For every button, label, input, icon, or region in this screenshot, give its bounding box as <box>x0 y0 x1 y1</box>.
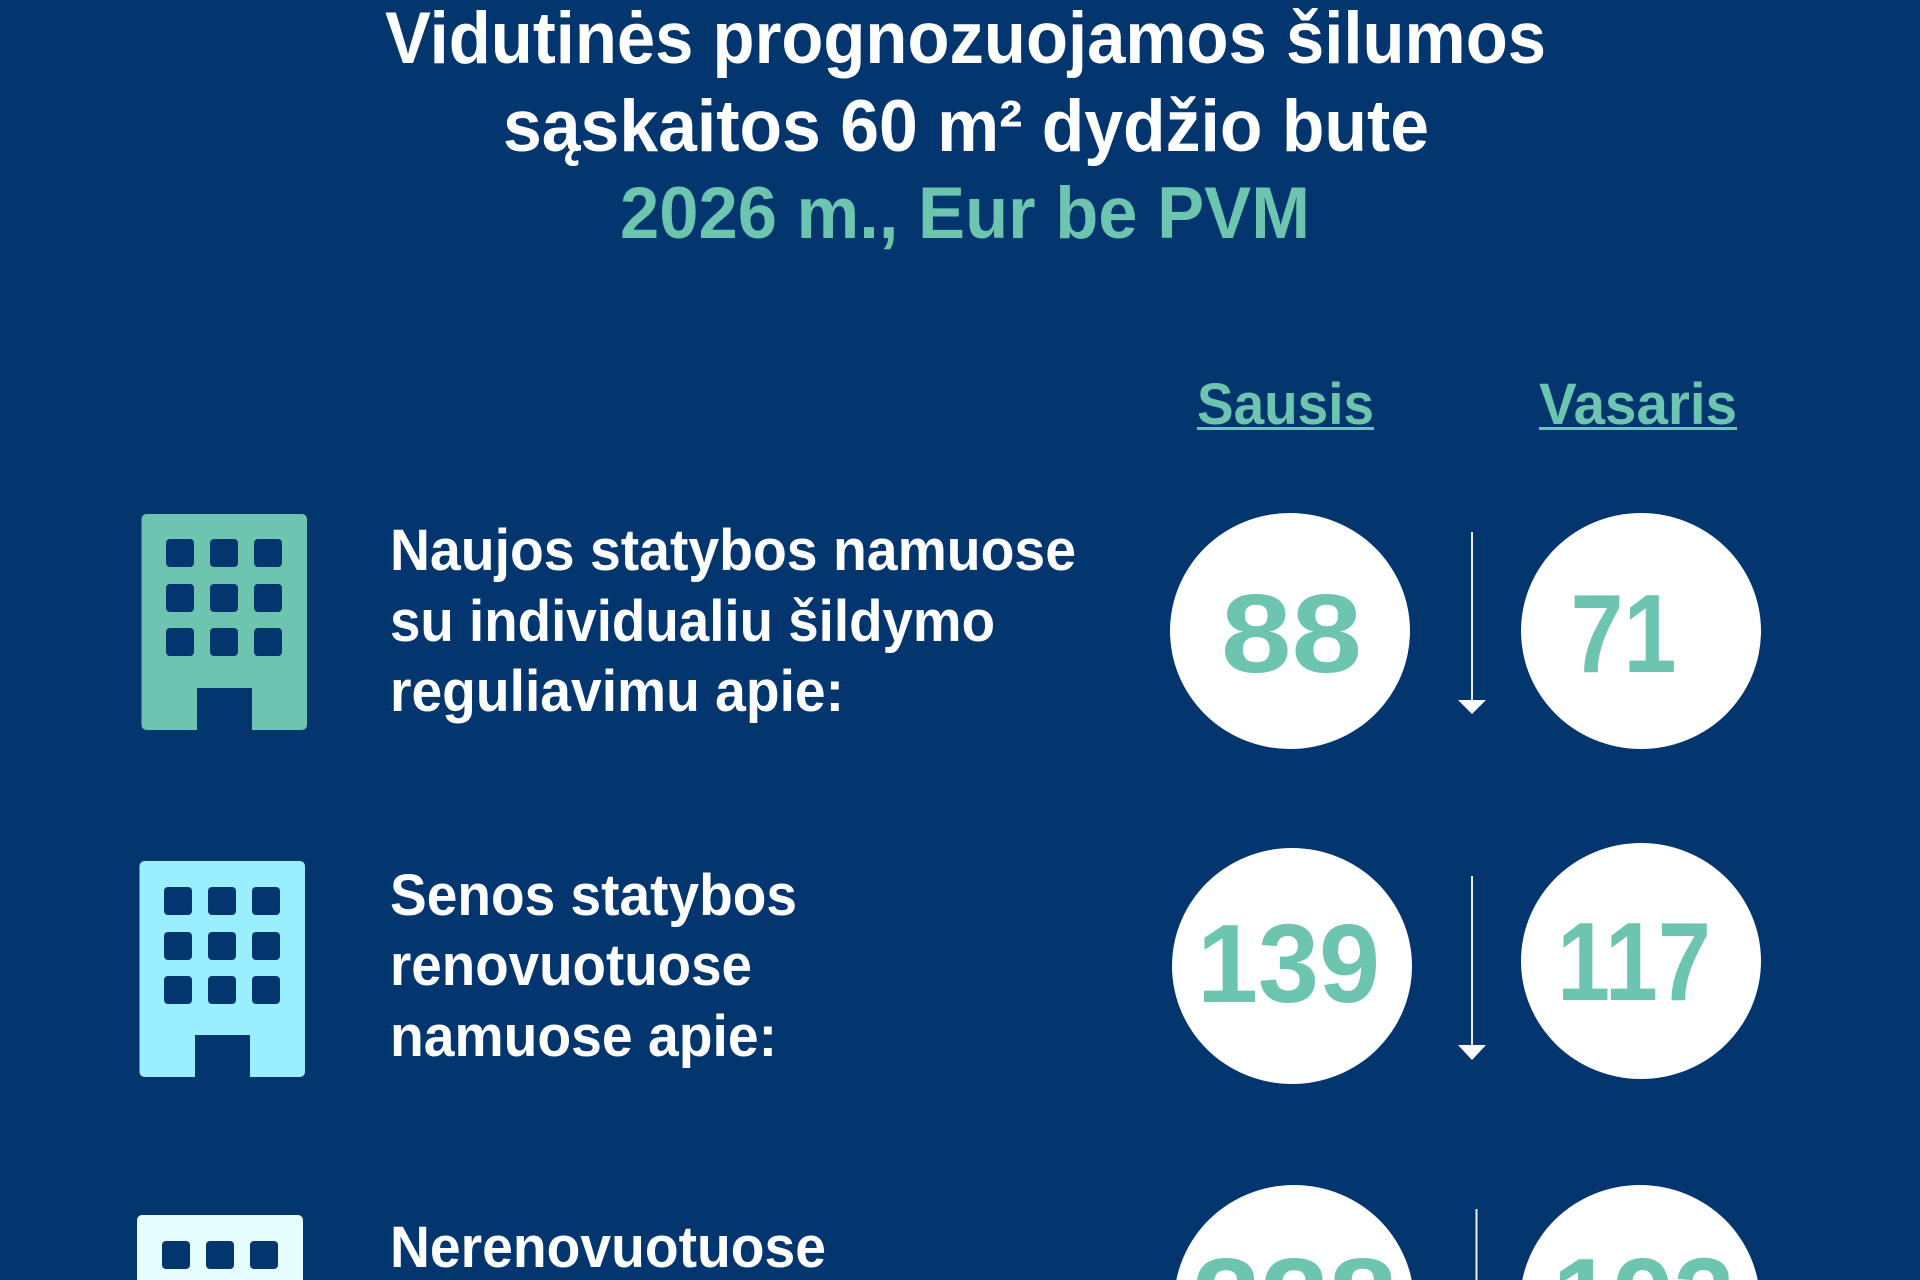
row: old renovated buildings <box>140 843 1761 1084</box>
row label: old renovated buildings: renovuotuose <box>390 933 752 998</box>
column header: Vasaris: Vasaris <box>1539 372 1737 437</box>
icon: pale building <box>137 1215 303 1280</box>
row label: old renovated buildings <box>390 863 797 1069</box>
icon: light blue building <box>140 861 305 1077</box>
arrow: decrease <box>1458 876 1486 1060</box>
circle: February value 117 <box>1521 843 1761 1079</box>
title <box>385 0 1546 254</box>
row label: old renovated buildings: Senos statybos <box>390 863 797 928</box>
circle: January value 88: 88 <box>1221 572 1362 696</box>
circle: January value <box>1176 1185 1412 1280</box>
icon: teal building <box>142 514 307 730</box>
row label: old renovated buildings: namuose apie: <box>390 1004 777 1069</box>
row label: new buildings: reguliavimu apie: <box>390 659 844 724</box>
circle: February value <box>1522 1185 1758 1280</box>
circle: February value 71 <box>1521 513 1761 749</box>
circle: February value 117: 117 <box>1557 900 1711 1024</box>
row label: new buildings: Naujos statybos namuose <box>390 518 1076 583</box>
row label: unrenovated buildings: Nerenovuotuose <box>390 1215 826 1280</box>
circle: January value 139: 139 <box>1197 902 1380 1026</box>
row label: new buildings <box>390 518 1076 724</box>
title: 2026 m., Eur be PVM <box>620 173 1310 254</box>
row label: new buildings: su individualiu šildymo <box>390 589 995 654</box>
row: unrenovated buildings <box>137 1185 1760 1280</box>
title: sąskaitos 60 m² dydžio bute <box>503 86 1429 167</box>
row: new buildings <box>142 513 1761 749</box>
arrow: decrease <box>1458 532 1486 714</box>
title: Vidutinės prognozuojamos šilumos <box>385 0 1546 79</box>
arrow: decrease <box>1476 1209 1478 1280</box>
circle: January value 139 <box>1172 848 1412 1084</box>
circle: February value 71: 71 <box>1570 572 1676 696</box>
column header: Sausis: Sausis <box>1197 372 1374 437</box>
circle: January value 88 <box>1170 513 1410 749</box>
